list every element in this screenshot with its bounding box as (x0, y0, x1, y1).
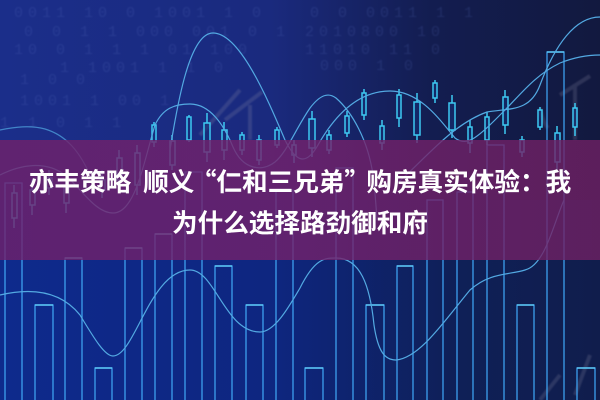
binary digits backdrop (0, 5, 478, 132)
title line 2: 为什么选择路劲御和府 (172, 203, 428, 240)
binary digits backdrop: 1 0 0 (20, 72, 90, 89)
purple title band (0, 140, 600, 260)
binary digits backdrop: 1 1 0 1 1 (0, 115, 126, 132)
binary digits backdrop: 000 1 0 (320, 58, 418, 75)
watermark strokes (200, 76, 590, 400)
title (29, 162, 571, 240)
title line 1: 亦丰策略 顺义“仁和三兄弟”购房真实体验：我 (29, 162, 571, 199)
binary digits backdrop: 1 1001 1 1 0 (60, 60, 228, 77)
binary digits backdrop: 10 0 1 1 1 01 100 (14, 42, 252, 59)
binary digits backdrop: 11010 11 0 (305, 42, 445, 59)
binary digits backdrop: 0 0 1 1 000 001 0 1 (24, 24, 290, 41)
candlesticks (12, 80, 577, 228)
binary digits backdrop: 0 0 0011 1 1 (310, 5, 478, 22)
binary digits backdrop: 1001 1 00 1 (20, 93, 174, 110)
bright bar caps (35, 52, 595, 368)
binary digits backdrop: 2010800 10 (305, 24, 445, 41)
binary digits backdrop: 0011 10 0 1001 1 0 (14, 5, 266, 22)
